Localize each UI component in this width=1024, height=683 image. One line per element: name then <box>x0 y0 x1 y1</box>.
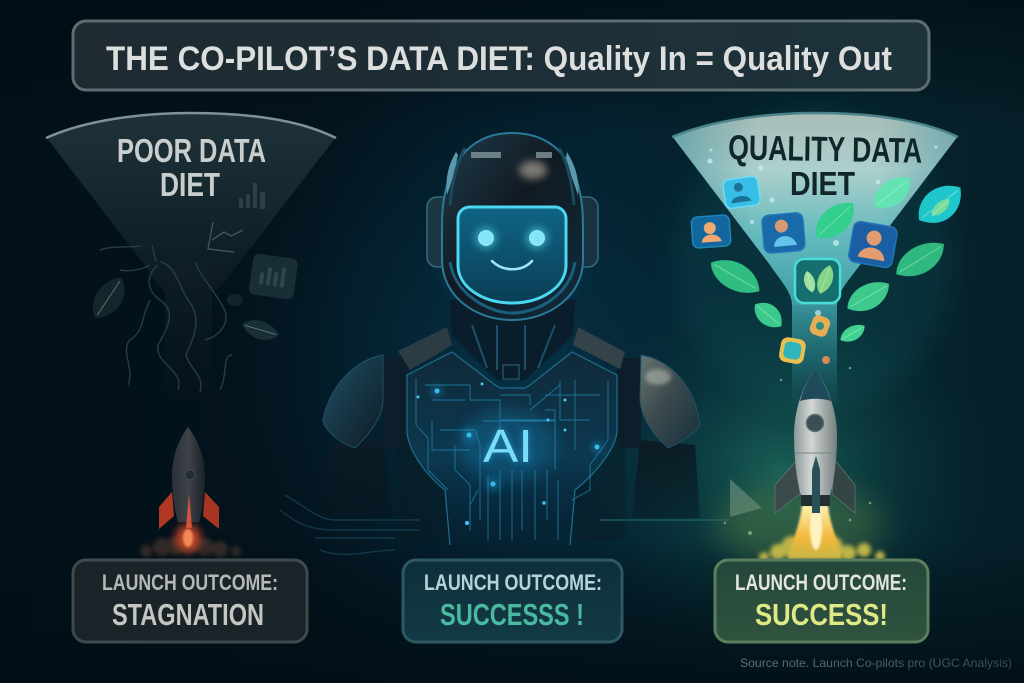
left arm <box>325 440 392 518</box>
connector arrow to right rocket <box>600 479 762 520</box>
smoke <box>140 534 241 557</box>
neck details <box>472 325 555 379</box>
robot <box>323 133 700 545</box>
flame core <box>810 506 822 550</box>
right fin <box>832 460 855 513</box>
funnel heading: DIET <box>790 165 855 202</box>
faint leaf right <box>239 315 281 346</box>
torso outline <box>407 352 617 545</box>
user tile 3 <box>761 212 806 254</box>
smoke <box>759 533 885 562</box>
sparks <box>724 367 871 535</box>
smile <box>492 261 532 269</box>
right joint <box>617 358 641 448</box>
outcome box: right success <box>715 560 928 642</box>
helmet inner band <box>450 148 574 205</box>
faint leaf left <box>84 271 134 325</box>
panel: quality data funnel <box>672 110 971 410</box>
user tile 2 <box>691 215 731 248</box>
green glow <box>715 485 885 565</box>
outcome value: SUCCESSS ! <box>440 597 584 632</box>
faint data tile <box>248 253 299 300</box>
body <box>794 369 837 495</box>
faint line chart in funnel <box>208 222 243 252</box>
right flank <box>575 430 625 540</box>
right collar <box>573 327 625 369</box>
faint squiggly data lines <box>100 245 232 392</box>
left shoulder pad <box>323 355 383 448</box>
funnel heading <box>117 132 266 203</box>
face screen <box>458 207 566 303</box>
panel: poor data funnel <box>46 112 336 400</box>
faint small blob <box>227 294 243 306</box>
leaf tile <box>795 259 840 303</box>
left fin <box>159 492 174 529</box>
right fin <box>203 492 219 529</box>
outcome label: LAUNCH OUTCOME: <box>102 570 278 595</box>
helmet <box>442 133 583 320</box>
left ear <box>427 197 451 267</box>
robot glow <box>442 190 582 320</box>
funnel heading: DIET <box>160 166 220 203</box>
AI chest label: AI <box>483 420 533 472</box>
left eye <box>478 230 494 246</box>
title banner <box>73 21 929 90</box>
user tile 4 <box>848 220 898 269</box>
circuit glow dots <box>416 382 600 525</box>
flame <box>788 505 842 559</box>
funnel edge shade <box>672 112 958 305</box>
dot halos <box>432 386 602 490</box>
outcome box: center success <box>403 560 622 642</box>
funnel cone <box>46 112 336 295</box>
funnel stem <box>165 262 212 400</box>
torso chest plate <box>407 352 617 545</box>
funnel cone <box>672 112 958 305</box>
window <box>806 414 824 432</box>
center fin <box>186 493 192 528</box>
title text: THE CO-PILOT’S DATA DIET: Quality In = Quality Out <box>106 40 892 78</box>
nose <box>800 369 831 401</box>
base <box>801 494 830 506</box>
body seam <box>795 452 836 454</box>
right ear <box>574 197 598 267</box>
sparkles <box>708 146 938 316</box>
rocket: stagnation <box>140 427 241 557</box>
right shoulder pad <box>640 355 700 448</box>
helmet shine <box>519 161 547 179</box>
AI chest halo <box>460 409 556 481</box>
funnel heading <box>728 128 923 202</box>
funnel rim <box>672 113 958 137</box>
source note: Source note. Launch Co-pilots pro (UGC Analysis) <box>740 656 1012 670</box>
helmet side highlights <box>446 152 578 195</box>
left flank <box>397 430 450 540</box>
eye glow <box>475 227 548 249</box>
connector traces to left <box>280 495 420 554</box>
face visor ring <box>450 262 575 313</box>
right arm <box>632 440 700 518</box>
background glow <box>675 110 955 410</box>
funnel heading: POOR DATA <box>117 132 266 169</box>
left joint <box>383 358 407 448</box>
outcome value: STAGNATION <box>112 597 264 632</box>
center fin <box>812 456 820 513</box>
right eye <box>529 230 545 246</box>
outcome label: LAUNCH OUTCOME: <box>735 570 907 595</box>
outcome label: LAUNCH OUTCOME: <box>424 570 602 595</box>
rocket: success <box>715 367 885 565</box>
orange dot <box>822 356 830 364</box>
AI glow: AI <box>483 420 533 472</box>
outcome box: stagnation <box>73 560 307 642</box>
circuit lines <box>416 378 608 540</box>
user tile 1 <box>722 176 761 209</box>
leaves <box>704 170 971 346</box>
neck <box>450 300 575 380</box>
body <box>172 427 205 522</box>
small data tiles <box>808 314 832 338</box>
funnel rim <box>46 113 336 138</box>
helmet top panel details <box>471 152 552 158</box>
window <box>185 470 195 480</box>
funnel heading: QUALITY DATA <box>728 128 923 171</box>
left fin <box>775 460 800 513</box>
flame <box>175 524 201 552</box>
funnel stem <box>792 295 837 405</box>
left collar <box>398 327 452 370</box>
faint bar chart in funnel <box>239 183 265 209</box>
right shoulder highlight <box>645 369 671 385</box>
outcome value: SUCCESS! <box>755 597 888 632</box>
